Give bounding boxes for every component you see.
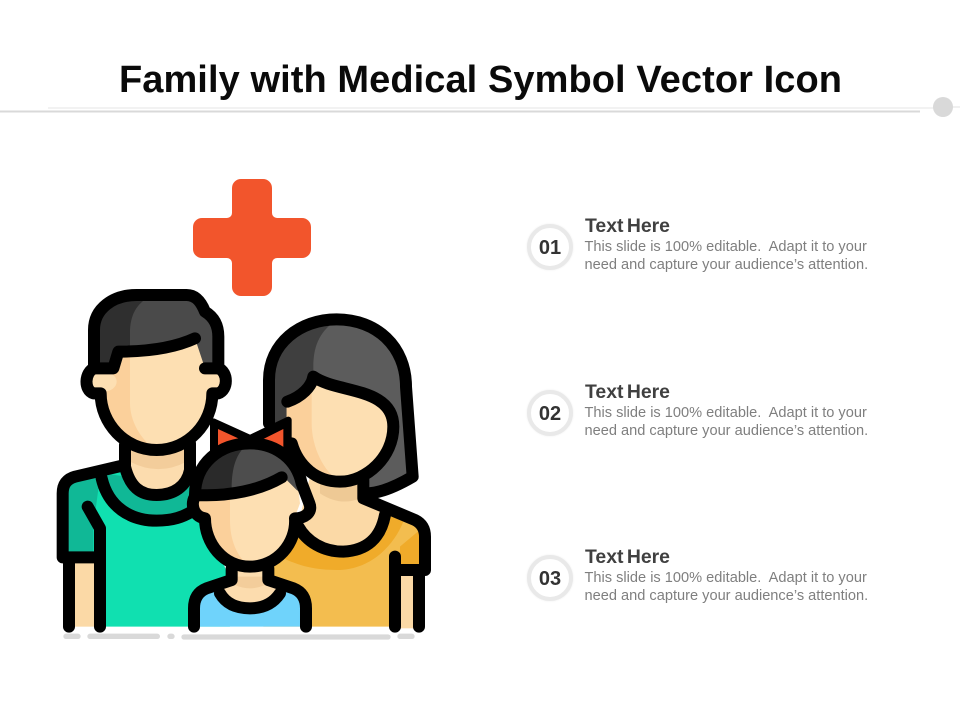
girl neck (217, 563, 283, 605)
woman (263, 319, 425, 628)
heading 01: Text Here (585, 215, 670, 237)
number 02 (527, 390, 573, 436)
man face (101, 337, 212, 450)
girl bow (213, 420, 288, 457)
number 01 (527, 224, 573, 270)
woman arm (395, 567, 419, 628)
man outline (63, 295, 226, 627)
item 03 (527, 546, 868, 604)
item 02 (527, 381, 868, 439)
man ears (90, 372, 117, 392)
man (63, 295, 230, 627)
icon: medical cross (193, 179, 311, 296)
body 03: This slide is 100% editable. Adapt it to your need and capture your audience’s attention. (584, 570, 868, 604)
number 02: 02 (539, 403, 561, 425)
girl face (197, 473, 300, 567)
girl outline (193, 443, 310, 627)
man shirt (63, 463, 230, 627)
man neck (125, 443, 190, 495)
man arm (68, 560, 100, 627)
heading 02: Text Here (585, 381, 670, 403)
number 03 (527, 555, 573, 601)
heading 03: Text Here (585, 546, 670, 568)
woman face (287, 377, 393, 482)
title: Family with Medical Symbol Vector Icon (119, 59, 842, 101)
woman outline (269, 319, 425, 627)
girl shirt (193, 582, 307, 627)
item 01 (527, 215, 868, 273)
family figures (63, 295, 425, 640)
woman neck (298, 477, 385, 552)
woman hair back (270, 320, 413, 493)
number 03: 03 (539, 568, 561, 590)
number 01: 01 (539, 237, 561, 259)
man hair (93, 295, 218, 368)
ground shadow (63, 634, 415, 640)
body 01: This slide is 100% editable. Adapt it to your need and capture your audience’s attention. (584, 239, 868, 273)
girl (193, 420, 310, 627)
girl hair (195, 443, 307, 497)
body 02: This slide is 100% editable. Adapt it to your need and capture your audience’s attention. (584, 405, 868, 439)
header dot (933, 97, 953, 117)
woman shirt (263, 497, 425, 627)
